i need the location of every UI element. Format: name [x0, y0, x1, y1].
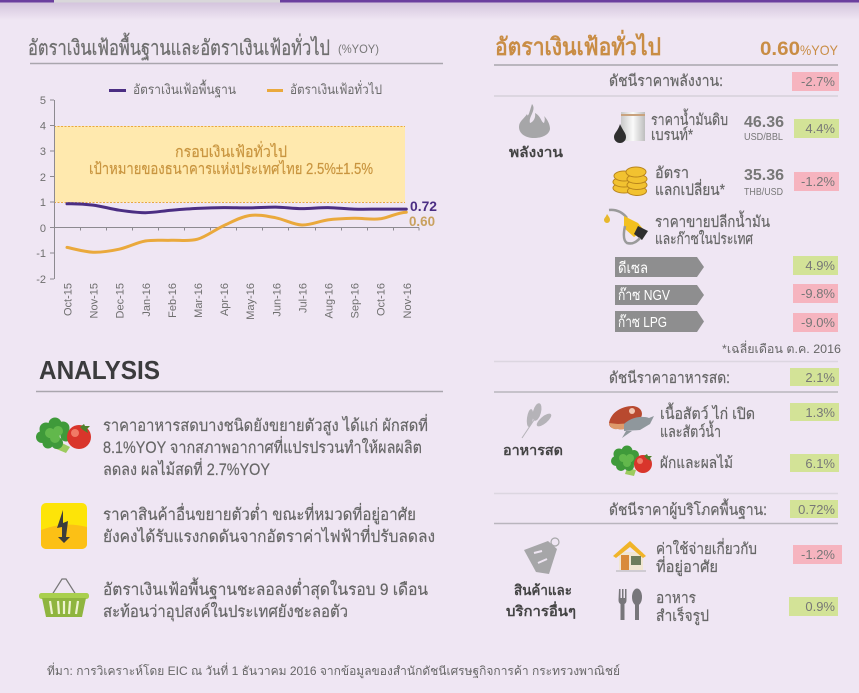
- analysis item: core inflation: [39, 577, 428, 622]
- icon: broccoli and tomato: [36, 418, 91, 453]
- icon: fuel nozzle: [604, 210, 648, 243]
- right panel heading: อัตราเงินเฟ้อทั่วไป: [495, 29, 661, 61]
- target band: เป้าหมายของธนาคารแห่งประเทศไทย 2.5%±1.5%: [89, 160, 373, 178]
- NGV row: ก๊าซ NGV: [618, 287, 670, 304]
- vegetable row: 6.1%: [805, 456, 835, 471]
- analysis heading: ANALYSIS: [39, 355, 160, 385]
- x axis labels: Oct-15: [62, 283, 74, 316]
- retail fuel heading: [604, 210, 770, 248]
- y axis labels: -1: [36, 248, 46, 260]
- source note: ที่มา: การวิเคราะห์โดย EIC ณ วันที่ 1 ธันวาคม 2016 จากข้อมูลของสำนักดัชนีเศรษฐกิจการค้า กระทรวงพาณิชย์: [47, 662, 620, 679]
- meat row: [609, 402, 839, 441]
- retail fuel heading: ราคาขายปลีกน้ำมัน: [655, 210, 770, 231]
- analysis text 2: ราคาสินค้าอื่นขยายตัวต่ำ ขณะที่หมวดที่อยู่อาศัย: [103, 503, 416, 525]
- vegetable row: ผักและผลไม้: [660, 454, 733, 472]
- icon: broccoli and tomato: [611, 446, 652, 476]
- diesel row: ดีเซล: [618, 260, 648, 277]
- core CPI index row: 0.72%: [798, 502, 835, 517]
- analysis text 3: [103, 577, 428, 622]
- end value labels: 0.60: [409, 213, 435, 229]
- prepared food row: 0.9%: [805, 599, 835, 614]
- chart heading: [28, 33, 443, 64]
- right panel heading: 0.60: [760, 39, 800, 60]
- housing row: ที่อยู่อาศัย: [656, 556, 718, 577]
- analysis text 1: 8.1%YOY จากสภาพอากาศที่แปรปรวนทำให้ผลผลิต: [103, 436, 422, 457]
- core CPI index row: [494, 494, 838, 524]
- icon: fork and spoon: [618, 588, 642, 620]
- icon: flame: [519, 104, 550, 138]
- exchange rate row: -1.2%: [801, 174, 835, 189]
- NGV row: -9.8%: [801, 286, 835, 301]
- housing row: [613, 538, 842, 577]
- y axis labels: [36, 95, 46, 286]
- y axis labels: 5: [40, 95, 46, 107]
- vegetable row: [611, 446, 839, 476]
- headline inflation line: [67, 212, 406, 252]
- x axis labels: Dec-15: [115, 283, 127, 318]
- analysis item: electricity: [41, 503, 435, 549]
- crude oil row: USD/BBL: [744, 132, 783, 143]
- axes: [50, 100, 419, 279]
- x axis labels: May-16: [245, 283, 257, 320]
- prepared food row: สำเร็จรูป: [656, 606, 709, 626]
- line chart: [36, 95, 437, 320]
- chart heading: อัตราเงินเฟ้อพื้นฐานและอัตราเงินเฟ้อทั่วไป: [28, 33, 330, 60]
- exchange rate row: 35.36: [744, 167, 784, 184]
- goods and services label: สินค้าและ: [514, 582, 572, 598]
- x axis labels: [62, 283, 414, 320]
- chart legend: อัตราเงินเฟ้อทั่วไป: [290, 80, 382, 97]
- x axis labels: Aug-16: [324, 283, 336, 318]
- analysis text 2: [103, 503, 435, 546]
- fresh food index row: ดัชนีราคาอาหารสด:: [609, 370, 730, 387]
- housing row: ค่าใช้จ่ายเกี่ยวกับ: [656, 538, 757, 558]
- icon: oil barrel: [614, 112, 645, 143]
- x axis labels: Sep-16: [350, 283, 362, 318]
- goods and services label: บริการอื่นๆ: [506, 601, 576, 619]
- diesel row: 4.9%: [805, 258, 835, 273]
- exchange rate row: แลกเปลี่ยน*: [655, 179, 725, 199]
- chart legend: อัตราเงินเฟ้อพื้นฐาน: [133, 79, 236, 98]
- x axis labels: Jun-16: [271, 283, 283, 317]
- chart heading: (%YOY): [338, 42, 379, 56]
- end value labels: 0.72: [410, 198, 437, 214]
- LPG row: ก๊าซ LPG: [618, 314, 667, 331]
- x axis labels: Jan-16: [141, 283, 153, 317]
- x axis labels: Jul-16: [297, 283, 309, 313]
- retail fuel heading: และก๊าซในประเทศ: [655, 230, 753, 248]
- housing row: -1.2%: [801, 547, 835, 562]
- crude oil row: เบรนท์*: [651, 126, 693, 144]
- analysis text 1: [103, 414, 428, 479]
- exchange rate row: THB/USD: [744, 187, 783, 198]
- icon: lightning bolt: [41, 503, 87, 549]
- analysis text 3: อัตราเงินเฟ้อพื้นฐานชะลอลงต่ำสุดในรอบ 9 เดือน: [103, 577, 428, 600]
- core CPI index row: ดัชนีราคาผู้บริโภคพื้นฐาน:: [609, 498, 767, 520]
- right panel heading: [494, 29, 839, 65]
- icon: price tag: [524, 538, 559, 574]
- end value labels: [409, 198, 437, 229]
- y axis labels: 1: [40, 197, 46, 209]
- y axis labels: 0: [40, 223, 46, 235]
- exchange rate row: [613, 165, 839, 199]
- fresh food label: อาหารสด: [503, 442, 563, 458]
- exchange rate row: อัตรา: [655, 165, 689, 182]
- LPG row: -9.0%: [801, 315, 835, 330]
- analysis text 1: ราคาอาหารสดบางชนิดยังขยายตัวสูง ได้แก่ ผักสดที่: [103, 414, 428, 436]
- prepared food row: อาหาร: [656, 590, 696, 607]
- fresh food category: [503, 402, 563, 458]
- crude oil row: 46.36: [744, 114, 784, 131]
- core inflation line: [67, 204, 406, 213]
- analysis text 1: ลดลง ผลไม้สดที่ 2.7%YOY: [103, 458, 270, 479]
- y axis labels: -2: [36, 274, 46, 286]
- meat row: เนื้อสัตว์ ไก่ เปิด: [660, 402, 755, 423]
- energy index row: -2.7%: [801, 74, 835, 89]
- icon: house: [613, 541, 646, 572]
- analysis text 3: สะท้อนว่าอุปสงค์ในประเทศยังชะลอตัว: [103, 602, 348, 622]
- goods and services category: [506, 538, 576, 619]
- goods and services label: [506, 582, 576, 619]
- NGV row: [615, 284, 838, 305]
- x axis labels: Nov-16: [402, 283, 414, 318]
- footnote: *เฉลี่ยเดือน ต.ค. 2016: [722, 340, 841, 356]
- energy category: [509, 104, 563, 160]
- analysis text 2: ยังคงได้รับแรงกดดันจากอัตราค่าไฟฟ้าที่ปรับลดลง: [103, 525, 435, 546]
- energy index row: [494, 72, 839, 96]
- fresh food index row: 2.1%: [805, 370, 835, 385]
- energy index row: ดัชนีราคาพลังงาน:: [609, 73, 723, 90]
- analysis item: fresh food: [36, 414, 428, 479]
- y axis labels: 3: [40, 146, 46, 158]
- fresh food index row: [494, 362, 839, 392]
- meat row: และสัตว์น้ำ: [660, 420, 721, 441]
- target band: กรอบเงินเฟ้อทั่วไป: [175, 141, 287, 161]
- prepared food row: [618, 588, 838, 626]
- meat row: 1.3%: [805, 405, 835, 420]
- top navigation bar: [0, 0, 859, 2]
- crude oil row: ราคาน้ำมันดิบ: [651, 108, 728, 129]
- icon: wheat: [522, 402, 553, 438]
- chart legend: [109, 79, 382, 98]
- right panel heading: %YOY: [800, 42, 839, 58]
- icon: shopping basket: [39, 579, 89, 617]
- crude oil row: 4.4%: [805, 121, 835, 136]
- y axis labels: 4: [40, 120, 46, 132]
- icon: meat and fish: [609, 406, 654, 438]
- x axis labels: Oct-16: [376, 283, 388, 316]
- LPG row: [615, 311, 838, 332]
- x axis labels: Mar-16: [193, 283, 205, 318]
- x axis labels: Apr-16: [219, 283, 231, 316]
- target band: [54, 126, 405, 202]
- diesel row: [615, 256, 838, 277]
- x axis labels: Feb-16: [167, 283, 179, 318]
- energy label: พลังงาน: [509, 144, 563, 160]
- x axis labels: Nov-15: [89, 283, 101, 318]
- crude oil row: [614, 108, 839, 144]
- y axis labels: 2: [40, 172, 46, 184]
- icon: gold coins: [613, 167, 647, 196]
